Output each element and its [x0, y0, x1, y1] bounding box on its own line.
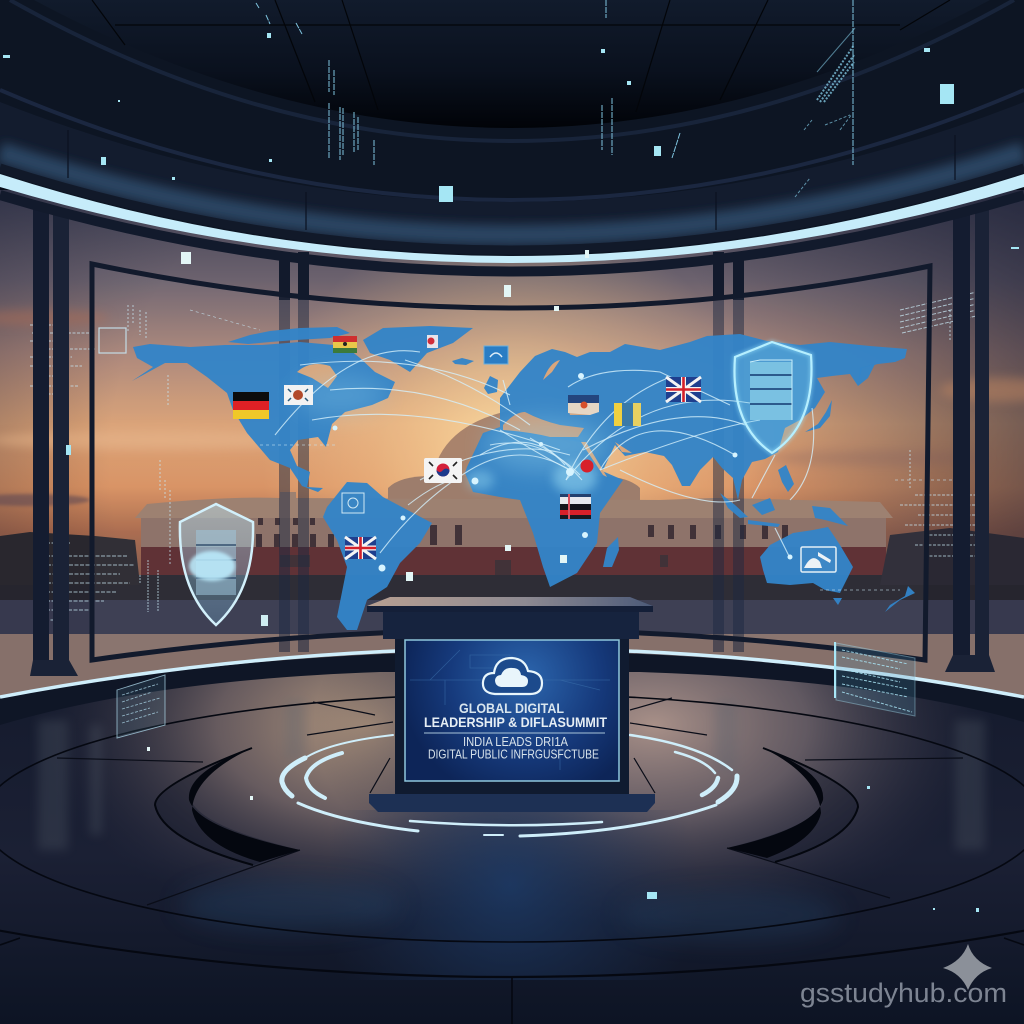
podium subtitle: INDIA LEADS DRI1A [463, 735, 569, 749]
floor [0, 648, 1024, 1024]
floor back band [0, 651, 1024, 725]
flag: south korea small [284, 385, 313, 405]
floor back light ring [0, 648, 1024, 697]
server stack right [750, 360, 792, 420]
server stack left [189, 530, 236, 595]
right upper data block [900, 290, 985, 333]
New Zealand [885, 586, 915, 612]
screen scatter column data [128, 305, 950, 565]
Greenland [363, 326, 473, 372]
flag: red yellow green [333, 336, 357, 353]
circuit lines [410, 650, 610, 770]
left lower data block [35, 543, 158, 620]
pillars [30, 205, 995, 676]
UK fragments [484, 376, 498, 394]
podium upper block [383, 612, 639, 639]
screen frame [92, 264, 930, 660]
flag: uk asia [666, 377, 701, 402]
floor outer ring [0, 927, 1024, 977]
holographic panel: left floor [117, 675, 165, 738]
world map [132, 326, 915, 630]
flag: yellow stripes [614, 403, 641, 426]
parliament building [135, 410, 893, 586]
shield: left with server and cloud [180, 504, 253, 625]
watermark star [943, 944, 992, 990]
podium title line two: LEADERSHIP & DIFLASUMMIT [424, 714, 607, 730]
shield: right with server [734, 342, 812, 453]
podium base [369, 794, 655, 812]
Philippines [778, 465, 794, 492]
Australia [760, 527, 853, 593]
curved glass map screen [90, 263, 932, 660]
icon: seal tile south america [342, 493, 364, 513]
flag: small red mark [427, 335, 438, 348]
Africa [465, 427, 623, 587]
North America [132, 342, 395, 492]
crescent right [727, 748, 858, 862]
flag: south korea large [424, 458, 462, 483]
ceiling panel band [0, 102, 1024, 249]
flag: uk south america [345, 537, 376, 559]
crescent left [155, 748, 300, 865]
flag: germany [233, 392, 269, 419]
podium title: GLOBAL DIGITAL [459, 700, 564, 716]
icon: australia tile [801, 547, 836, 572]
lower trim [0, 195, 1024, 272]
South America [323, 482, 432, 630]
holographic panel: right floor [835, 642, 915, 716]
floor radial lines [57, 698, 963, 905]
Tasmania [833, 598, 842, 605]
map inland seas [297, 360, 632, 477]
Madagascar [603, 537, 619, 567]
flag: blue white with red [568, 395, 599, 415]
ceiling trim gap [0, 168, 1024, 250]
right mid data block [900, 495, 985, 556]
ceiling dark opening [34, 0, 990, 128]
icon: left data tile [99, 328, 126, 353]
watermark: gsstudyhub.com [800, 978, 1007, 1008]
pillar reflections [38, 700, 985, 850]
podium slab [367, 597, 653, 612]
map glow around hubs [295, 375, 605, 494]
ceiling panels [92, 0, 950, 112]
marker: red seal [580, 460, 594, 472]
Arctic islands [228, 327, 350, 344]
Indonesia [720, 493, 748, 518]
ceiling outer shell [0, 0, 1024, 262]
floor outer ellipse [0, 694, 1024, 942]
network nodes [288, 373, 792, 572]
podium display [405, 640, 619, 781]
data streams on glass [30, 290, 985, 620]
icon: blue chevron tile [484, 346, 508, 364]
Japan [805, 400, 832, 432]
left upper data block [30, 325, 95, 394]
light strip [0, 174, 1024, 263]
mullions behind screen [279, 252, 744, 652]
ceiling [0, 0, 1024, 272]
ceiling data streams [256, 0, 855, 197]
network arcs [275, 351, 814, 558]
ceiling ring stripe [0, 90, 1024, 200]
ground and trees [0, 575, 1024, 602]
glow rings [282, 735, 737, 836]
icon: cloud [483, 658, 542, 694]
flag: striped [560, 494, 591, 519]
podium [367, 597, 655, 812]
Eurasia [500, 334, 907, 500]
podium subtitle line two: DIGITAL PUBLIC INFRGUSFCTUBE [428, 748, 599, 762]
window view: sunset sky and parliament [0, 190, 1024, 704]
